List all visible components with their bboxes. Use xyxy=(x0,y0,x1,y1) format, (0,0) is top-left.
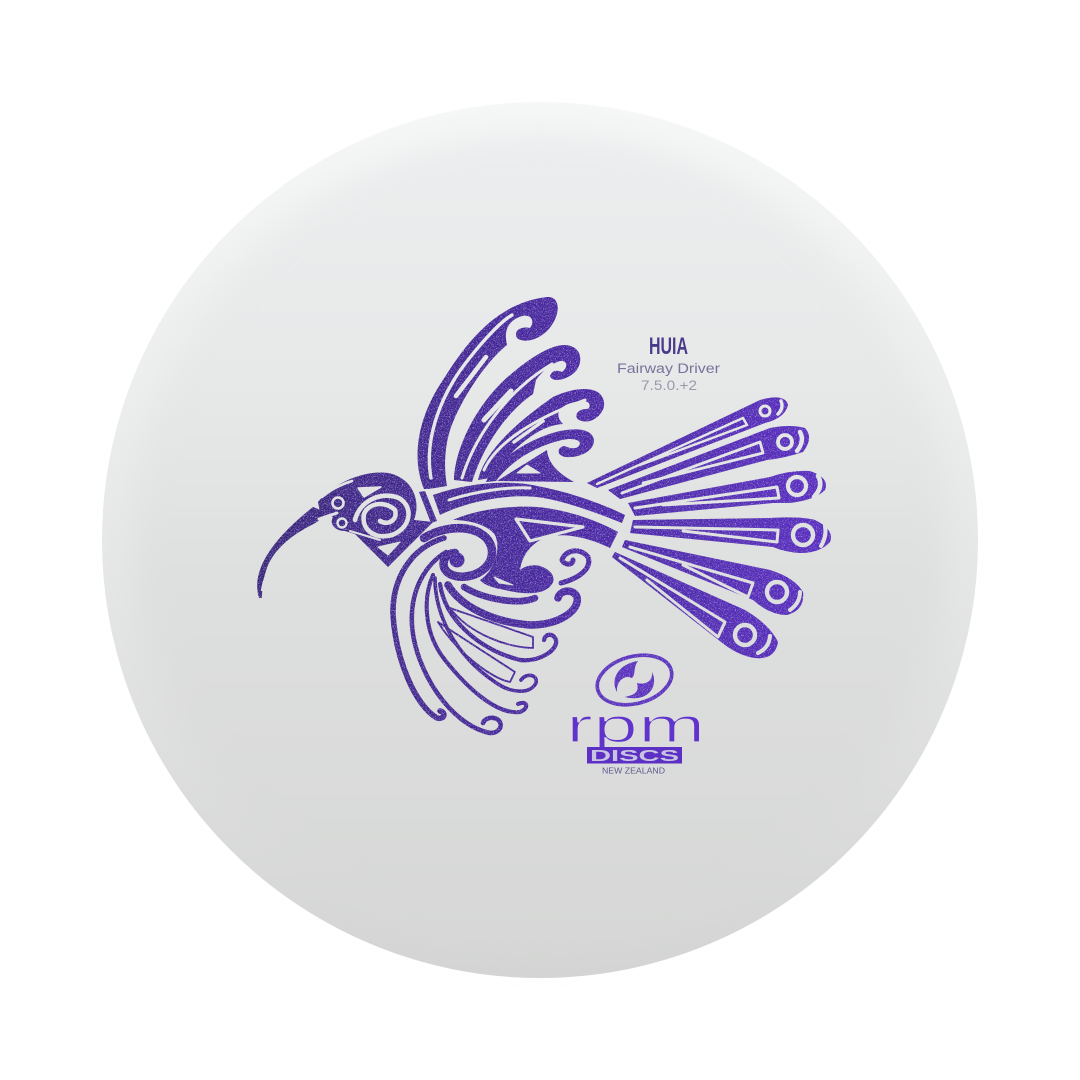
feather 5 xyxy=(622,540,803,615)
logo swirl xyxy=(615,661,638,692)
feather E xyxy=(497,450,574,482)
feather C xyxy=(478,389,604,480)
neck stripe xyxy=(419,491,437,523)
flight numbers: 7.5.0.+2 xyxy=(641,378,697,393)
head xyxy=(318,473,433,567)
logo caption: NEW ZEALAND xyxy=(602,766,665,776)
feather 6 xyxy=(448,585,577,625)
feather B xyxy=(454,345,580,482)
tail feathers xyxy=(587,397,831,658)
feather thin outlines xyxy=(450,608,533,648)
wing upper feathers xyxy=(418,297,604,489)
logo badge: discs xyxy=(587,747,682,765)
feather 2 xyxy=(608,426,809,499)
disc xyxy=(102,102,978,978)
feather 6 xyxy=(612,552,778,658)
feather 3 xyxy=(427,575,526,712)
feather 7 xyxy=(464,587,535,601)
logo badge: discs: DISCS xyxy=(590,748,679,765)
beak xyxy=(257,507,333,598)
disc type: Fairway Driver xyxy=(617,361,721,376)
logo ring xyxy=(595,653,674,707)
feather A xyxy=(418,297,558,489)
feather 4 xyxy=(630,517,831,553)
lower wing xyxy=(393,528,589,733)
body band xyxy=(433,483,625,523)
curl top xyxy=(561,551,589,583)
feather D xyxy=(486,429,594,482)
feather 2 xyxy=(412,552,501,733)
feather 3 xyxy=(628,471,826,516)
spiral xyxy=(424,528,492,577)
bird artwork: huia xyxy=(257,297,831,733)
body xyxy=(453,507,618,593)
feather 1 xyxy=(587,397,788,488)
logo wordmark: rpm: rpm xyxy=(566,699,705,753)
title: disc name: HUIA xyxy=(649,333,688,360)
outer feather xyxy=(393,538,444,718)
logo mark xyxy=(595,653,674,707)
feather 4 xyxy=(435,578,536,691)
feather 5 xyxy=(440,584,556,660)
